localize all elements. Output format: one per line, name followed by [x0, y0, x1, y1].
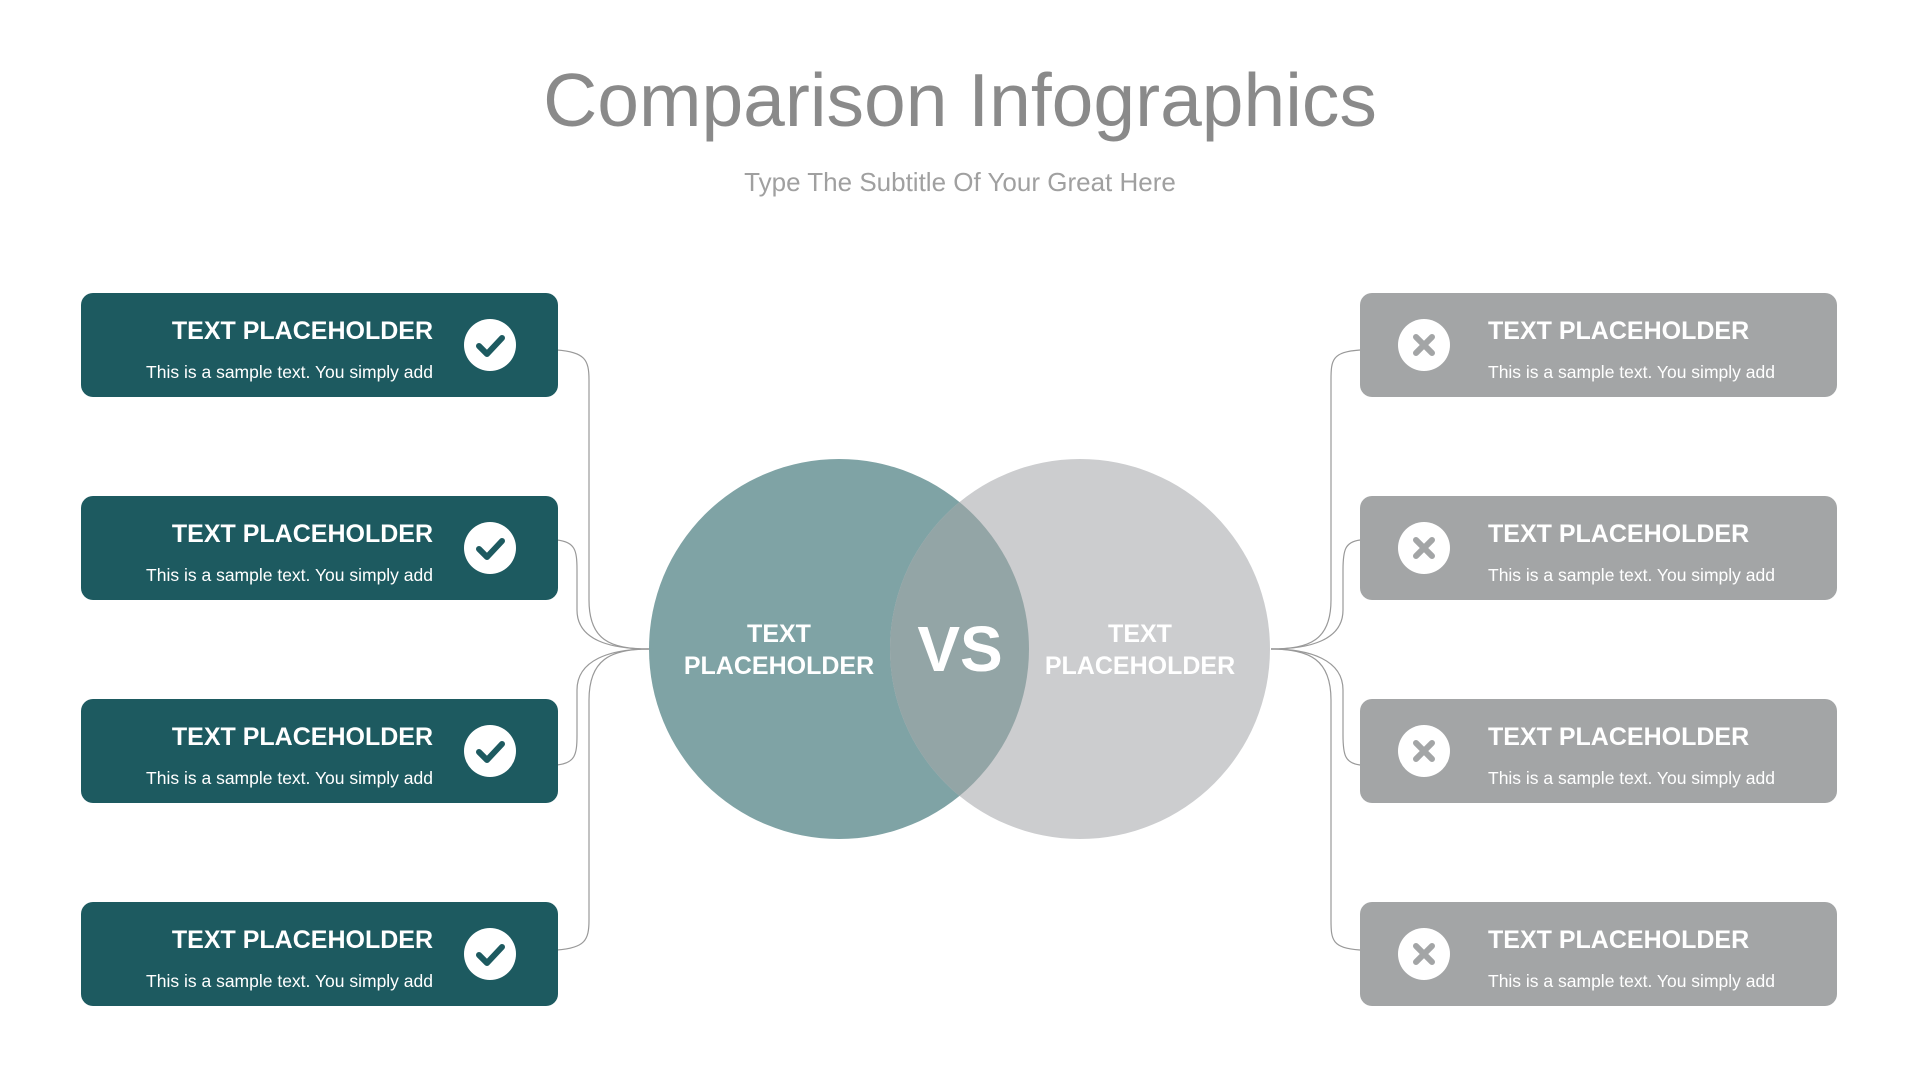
left box 1: TEXT PLACEHOLDER [172, 317, 433, 345]
venn diagram: PLACEHOLDER [1045, 652, 1235, 680]
left box 4: TEXT PLACEHOLDER [172, 926, 433, 954]
right box 4: This is a sample text. You simply add [1488, 971, 1775, 991]
left box 4 [81, 902, 558, 1006]
right box 3 [1360, 699, 1837, 803]
left box 4: This is a sample text. You simply add [146, 971, 433, 991]
right box 3: TEXT PLACEHOLDER [1488, 723, 1749, 751]
title: Comparison Infographics [543, 58, 1377, 142]
venn diagram: TEXT [747, 620, 811, 648]
right box 2: TEXT PLACEHOLDER [1488, 520, 1749, 548]
left box 3: This is a sample text. You simply add [146, 768, 433, 788]
right box 1: This is a sample text. You simply add [1488, 362, 1775, 382]
venn diagram: PLACEHOLDER [684, 652, 874, 680]
left box 2 [81, 496, 558, 600]
subtitle: Type The Subtitle Of Your Great Here [744, 167, 1176, 197]
venn diagram: VS [917, 613, 1003, 685]
left box 2: This is a sample text. You simply add [146, 565, 433, 585]
right box 3: This is a sample text. You simply add [1488, 768, 1775, 788]
right box 1: TEXT PLACEHOLDER [1488, 317, 1749, 345]
left box 1 [81, 293, 558, 397]
right box 4 [1360, 902, 1837, 1006]
right box 2: This is a sample text. You simply add [1488, 565, 1775, 585]
right box 2 [1360, 496, 1837, 600]
venn diagram: TEXT [1108, 620, 1172, 648]
left box 3 [81, 699, 558, 803]
left box 1: This is a sample text. You simply add [146, 362, 433, 382]
venn diagram [649, 459, 1270, 839]
left box 2: TEXT PLACEHOLDER [172, 520, 433, 548]
right box 1 [1360, 293, 1837, 397]
left box 3: TEXT PLACEHOLDER [172, 723, 433, 751]
right box 4: TEXT PLACEHOLDER [1488, 926, 1749, 954]
